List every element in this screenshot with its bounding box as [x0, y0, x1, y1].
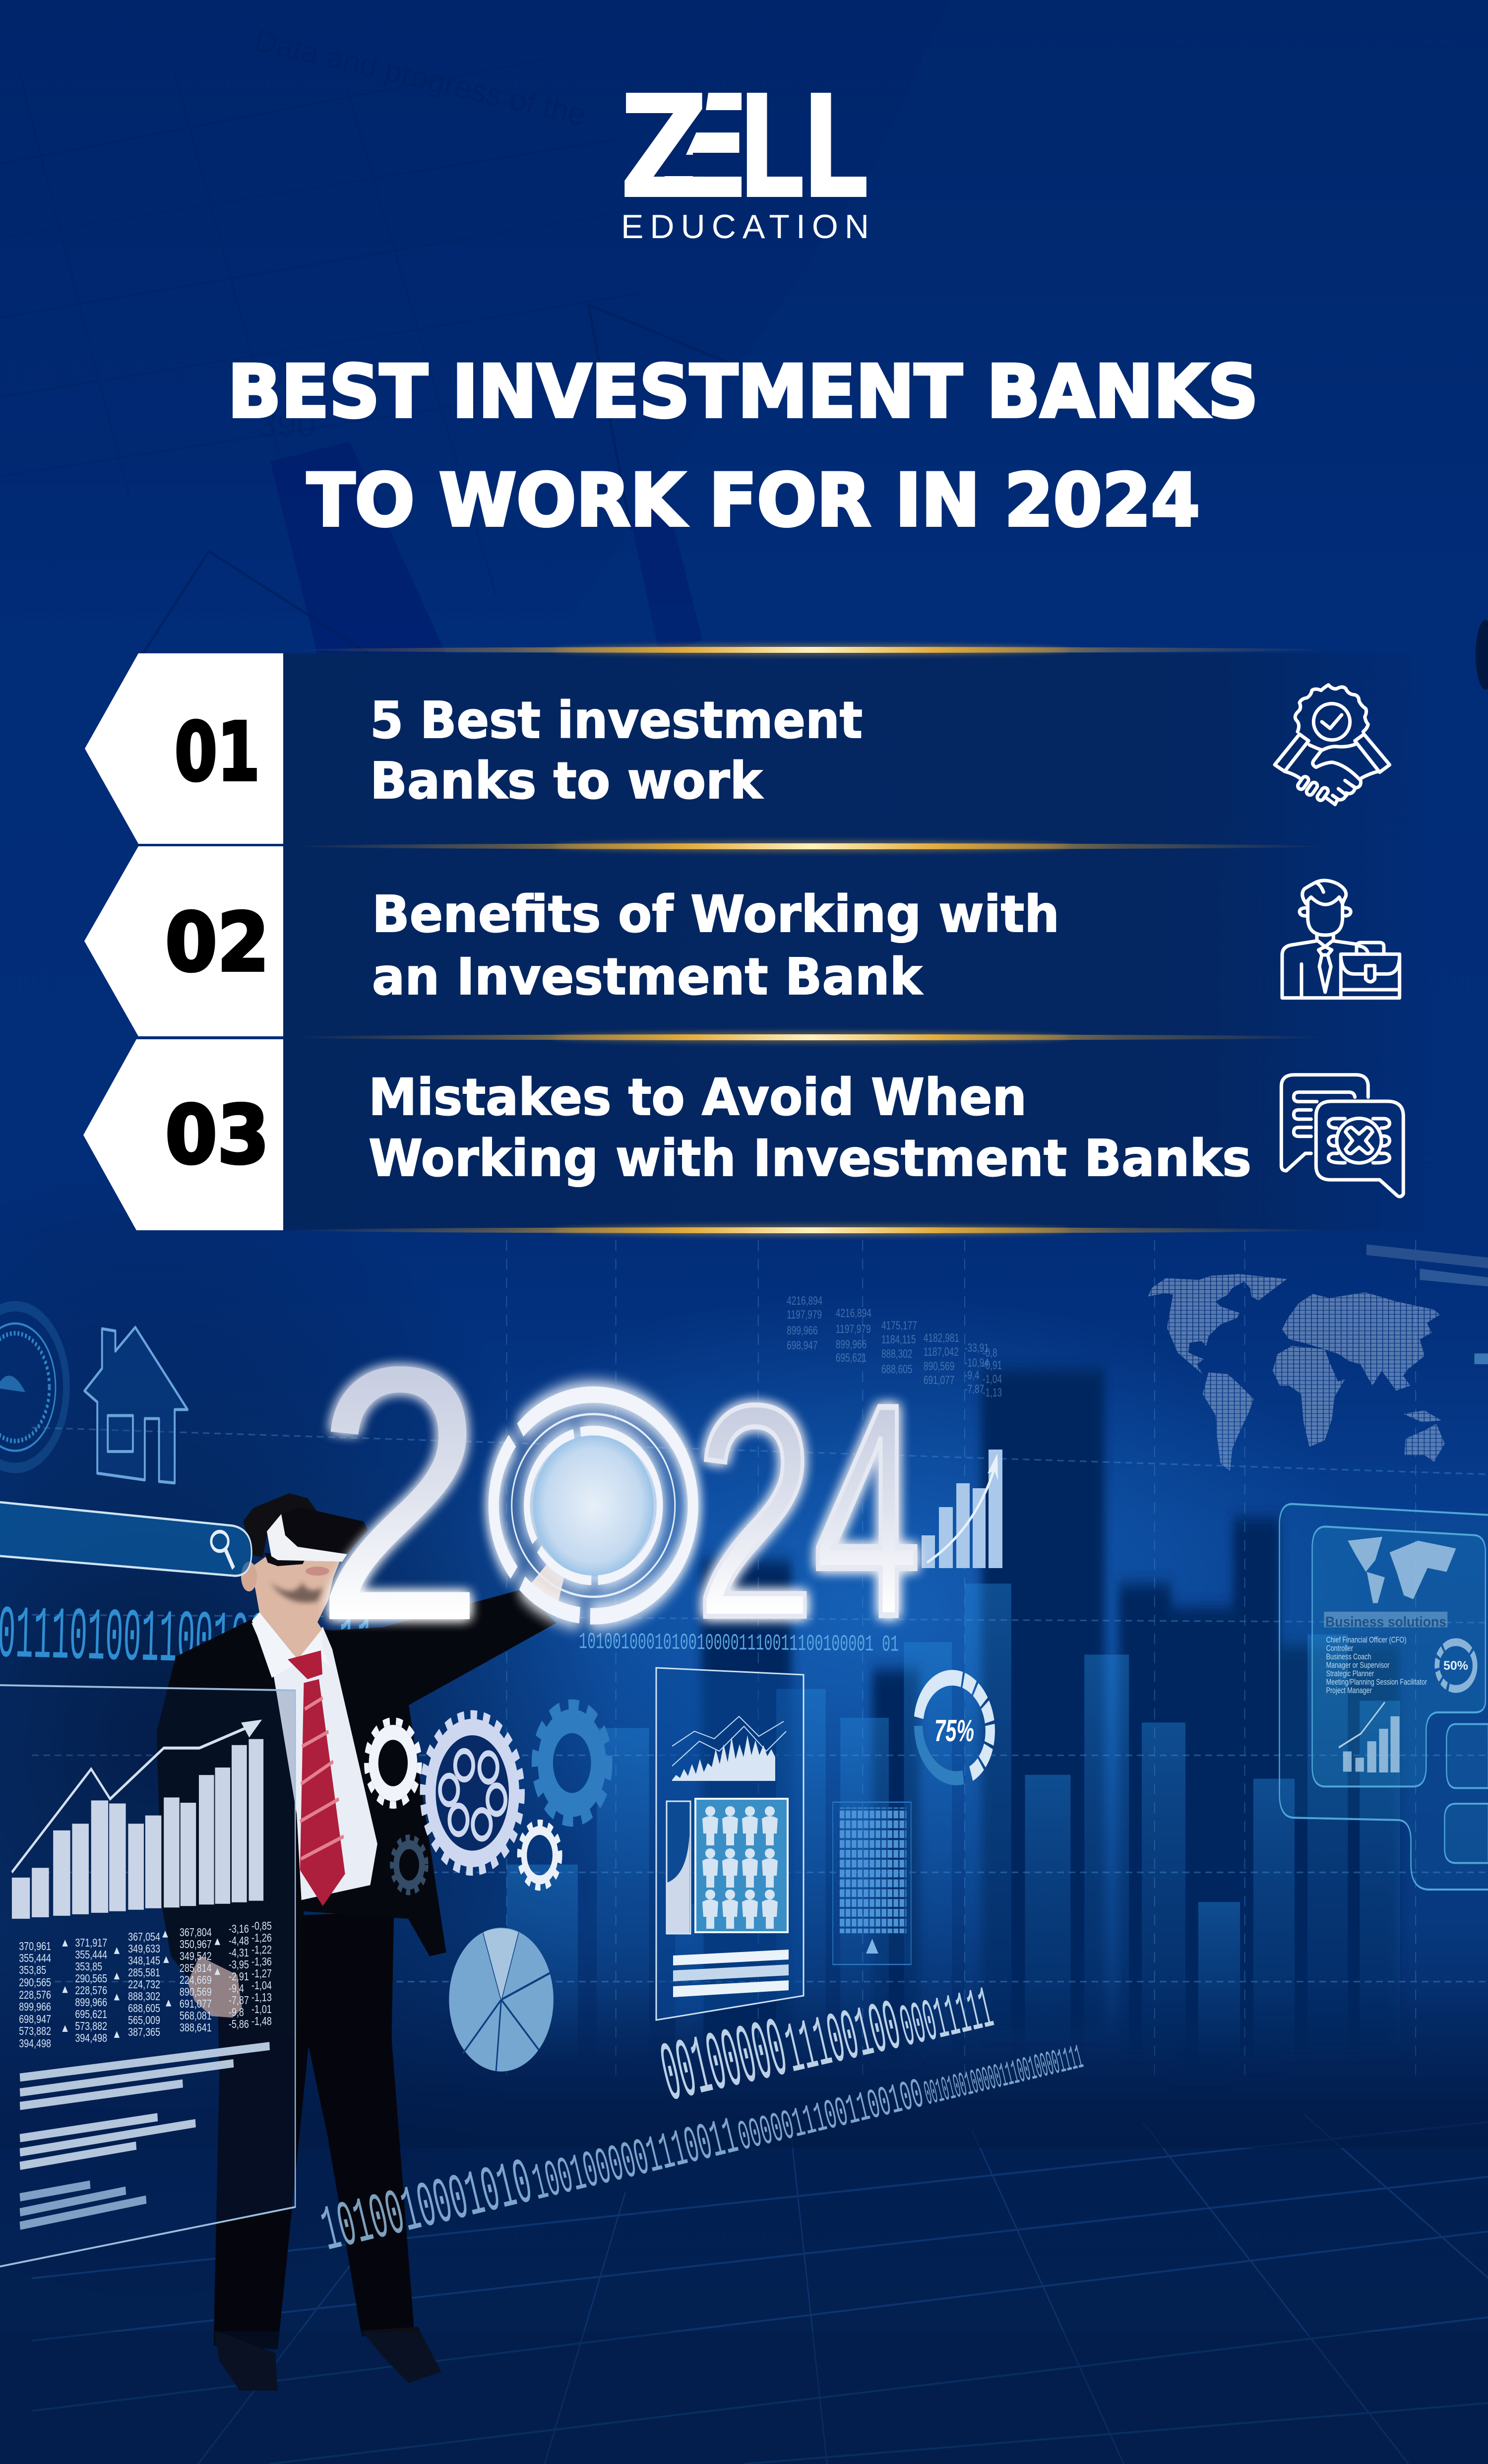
number table: -9,8 [229, 2006, 244, 2019]
text 03 [369, 1068, 1251, 1188]
binary row, lower diagonal: 1001000001110011 [527, 2108, 744, 2214]
number table: 355,444 [75, 1949, 107, 1961]
number table: 388,641 [180, 2022, 212, 2034]
number table: -1,22 [251, 1944, 272, 1957]
number tab 02 [84, 846, 283, 1036]
number table: -9,4 [229, 1982, 244, 1995]
house icon [84, 1327, 187, 1483]
small rising bar chart [922, 1450, 1002, 1568]
row 02 [84, 846, 1400, 1036]
number table: 691,077 [180, 1998, 212, 2011]
photo backdrop: skyline, translucent bars and data overlays: 001010010000011100100001111 [921, 2039, 1087, 2115]
UI panel text: Meeting/Planning Session Facilitator [1326, 1677, 1427, 1687]
large gear [423, 1715, 522, 1871]
binary row, middle diagonal [653, 1977, 999, 2125]
gold divider lines [293, 644, 1330, 1236]
number table: -5,86 [229, 2018, 249, 2031]
text 01 [370, 691, 863, 811]
number tab 03 [83, 1039, 283, 1230]
bar chart with arrow [12, 1719, 263, 1919]
number table: 573,882 [19, 2025, 51, 2038]
logo [624, 93, 867, 238]
faint numbers: 695,621 [836, 1351, 867, 1365]
blurred document behind the title: 390 [258, 405, 316, 444]
table triangles [62, 1931, 220, 2038]
number table: 695,621 [75, 2008, 107, 2021]
logo word ZELL [624, 93, 867, 197]
binary row, lower diagonal [315, 2039, 1087, 2269]
faint numbers: 1197,979 [836, 1323, 871, 1336]
number table: 568,081 [180, 2010, 212, 2022]
neck and face [241, 1555, 342, 1659]
number table: -1,48 [251, 2015, 272, 2028]
number table: -1,27 [251, 1967, 272, 1980]
number table: 285,814 [180, 1962, 212, 1975]
number table: -1,36 [251, 1956, 272, 1968]
digits [314, 1291, 921, 1696]
faint numbers: 899,966 [787, 1324, 818, 1337]
number table: -3,95 [229, 1959, 249, 1971]
logo word ZELL: L [737, 65, 806, 231]
blurred document behind the title [0, 0, 949, 655]
faint numbers: -33,91 [965, 1341, 989, 1355]
faint numbers: -9,4 [965, 1369, 980, 1382]
right UI panel [1279, 1504, 1488, 1890]
panel frame [0, 1685, 295, 2267]
number 02: 02 [165, 896, 269, 990]
faint numbers: 888,302 [881, 1347, 912, 1361]
ring target [494, 1394, 693, 1616]
number table: 353,85 [19, 1964, 46, 1977]
faint numbers: -0,8 [983, 1346, 997, 1360]
number table: 367,054 [128, 1931, 160, 1944]
UI panel text: Project Manager [1326, 1686, 1372, 1696]
skyline silhouettes [701, 1369, 1399, 2075]
title: BEST INVESTMENT BANKS [228, 350, 1258, 434]
shirt collar [252, 1612, 331, 1678]
faint numbers: -1,04 [983, 1373, 1002, 1386]
number table: -1,26 [251, 1932, 272, 1945]
left data panel [0, 1685, 295, 2267]
faint numbers: 899,966 [836, 1338, 867, 1351]
number table: 394,498 [75, 2032, 107, 2045]
number table: 899,966 [19, 2001, 51, 2014]
number table: 394,498 [19, 2037, 51, 2050]
number table: 224,732 [128, 1978, 160, 1991]
faint numbers: 890,569 [924, 1360, 954, 1373]
faint numbers: -0,91 [983, 1359, 1002, 1372]
text 02: an Investment Bank [372, 948, 923, 1007]
UI panel text: Controller [1326, 1643, 1353, 1653]
number table: -1,01 [251, 2003, 272, 2016]
dot matrix panel [833, 1802, 911, 1964]
number table: 228,576 [75, 1984, 107, 1997]
number table: 290,565 [19, 1976, 51, 1989]
number table: 890,569 [180, 1986, 212, 1999]
number table: -0,85 [251, 1920, 272, 1933]
small white gear [519, 1823, 560, 1888]
gear group [367, 1705, 609, 1892]
UI panel text: Business Coach [1326, 1652, 1371, 1662]
UI panel text: 50% [1443, 1659, 1468, 1673]
list panel [83, 644, 1439, 1236]
tall translucent bars [506, 1583, 1400, 2072]
stripes [673, 1950, 789, 1997]
number table: 228,576 [19, 1989, 51, 2002]
icon: businessman with briefcase [1282, 881, 1400, 998]
text 02: Benefits of Working with [372, 885, 1059, 944]
number table: 573,882 [75, 2020, 107, 2033]
number table: 367,804 [180, 1926, 212, 1939]
number table: 290,565 [75, 1972, 107, 1985]
logo word ZELL: L [801, 65, 869, 231]
number table: 224,669 [180, 1974, 212, 1987]
binary row, lower diagonal: 1010010001010 [315, 2148, 539, 2269]
dark band behind the list rows [283, 653, 1439, 1230]
line and waveform chart [672, 1716, 786, 1781]
UI panel text: Chief Financial Officer (CFO) [1326, 1635, 1406, 1645]
digits: 2 [694, 1342, 816, 1680]
number table: -2,91 [229, 1970, 249, 1983]
digits: 2 [314, 1291, 485, 1696]
compass icon [0, 1306, 66, 1468]
number table: 899,966 [75, 1996, 107, 2009]
number table: 370,961 [19, 1940, 51, 1953]
number table: 350,967 [180, 1938, 212, 1951]
faint numbers: 691,077 [924, 1374, 954, 1387]
UI panel text: Manager or Supervisor [1326, 1660, 1389, 1670]
text 02 [372, 885, 1059, 1007]
UI mini map and chart [1324, 1537, 1475, 1772]
logo word ZELL: Z [619, 64, 709, 231]
faint numbers: -1,13 [983, 1386, 1002, 1399]
dark gear [392, 1838, 426, 1892]
faint numbers: 4182,981 [924, 1331, 959, 1345]
number table: 355,444 [19, 1952, 51, 1965]
tie [288, 1650, 345, 1906]
dashed data grid [32, 1240, 1488, 2083]
suit and shoes [157, 1537, 572, 2391]
binary row, middle diagonal: 11100100 [779, 1987, 908, 2093]
number table: -1,13 [251, 1991, 272, 2004]
number table: 888,302 [128, 1990, 160, 2003]
icon: award handshake [1275, 685, 1390, 805]
world map [1148, 1274, 1445, 1471]
number table: -4,48 [229, 1935, 249, 1948]
number 03: 03 [165, 1089, 269, 1182]
hair [243, 1493, 318, 1558]
binary row, centre: 10100100010100100001110011100100001 01 [579, 1629, 899, 1658]
photo backdrop: skyline, translucent bars and data overlays: 011101001100100000 11 [0, 1594, 375, 1689]
binary row, middle diagonal: 00100000 [653, 2004, 796, 2125]
faint numbers: 4175,177 [881, 1319, 917, 1332]
UI panel text [1325, 1614, 1468, 1696]
faint numbers [787, 1294, 1002, 1399]
blurred document behind the title: Data and progress of the [251, 23, 589, 132]
floor grid [32, 2114, 1488, 2464]
faint numbers: 698,947 [787, 1339, 818, 1352]
corner bars near the map [1366, 1244, 1488, 1364]
number table: -4,31 [229, 1947, 249, 1959]
75% ring [914, 1668, 995, 1787]
UI panel text: Strategic Planner [1326, 1669, 1374, 1679]
text 01: 5 Best investment [370, 691, 863, 750]
faint numbers: -7,87 [965, 1383, 984, 1396]
number table: 387,365 [128, 2026, 160, 2039]
number table [19, 1920, 272, 2050]
number tab 01 [85, 653, 283, 844]
row 01 [85, 653, 1390, 844]
number table: 371,917 [75, 1937, 107, 1950]
faint numbers: 1187,042 [924, 1345, 959, 1359]
hand on the data panel [187, 1956, 242, 2018]
number table: 349,633 [128, 1943, 160, 1956]
logo word EDUCATION: EDUCATION [621, 208, 869, 246]
row 03 [83, 1039, 1403, 1230]
text 03: Working with Investment Banks [369, 1129, 1251, 1188]
photo backdrop: skyline, translucent bars and data overlays: 00011111 [895, 1977, 999, 2063]
title [228, 350, 1258, 543]
number 01: 01 [175, 706, 260, 799]
blue gear [535, 1705, 609, 1822]
number table: -7,87 [229, 1994, 249, 2007]
number table: 285,581 [128, 1966, 160, 1979]
VR headset [264, 1507, 368, 1566]
number table: 353,85 [75, 1960, 102, 1973]
number table: 348,145 [128, 1955, 160, 1967]
logo word ZELL: E [650, 64, 755, 231]
businessman with VR headset [157, 1493, 572, 2391]
number table: 349,542 [180, 1950, 212, 1963]
text 01: Banks to work [370, 752, 763, 811]
faint numbers: -10,94 [965, 1356, 989, 1370]
text-line bars [20, 2046, 270, 2226]
left white gear [367, 1721, 420, 1805]
number table: 565,009 [128, 2014, 160, 2027]
binary row, lower diagonal: 00000111001100100 [734, 2071, 928, 2162]
75% ring: 75% [934, 1714, 974, 1748]
faint numbers: 4216,894 [836, 1307, 871, 1320]
faint numbers: 688,605 [881, 1363, 912, 1376]
number table: -3,16 [229, 1923, 249, 1936]
digits: 4 [813, 1341, 921, 1680]
photo backdrop: skyline, translucent bars and data overlays [0, 1240, 1488, 2464]
large 2024 with ring [314, 1291, 921, 1696]
text 03: Mistakes to Avoid When [369, 1068, 1027, 1127]
faint numbers: 4216,894 [787, 1294, 823, 1308]
number table: 698,947 [19, 2013, 51, 2026]
pie chart [449, 1928, 554, 2072]
title: TO WORK FOR IN 2024 [307, 458, 1200, 543]
UI panel text: Business solutions [1325, 1614, 1446, 1630]
central data panel [656, 1668, 804, 2020]
icon: chat bubbles with cross [1281, 1075, 1403, 1197]
small side panel [667, 1801, 690, 1934]
number table: 688,605 [128, 2002, 160, 2015]
faint numbers: 1197,979 [787, 1308, 822, 1322]
people box [695, 1799, 788, 1932]
faint numbers: 1184,115 [881, 1333, 916, 1346]
number table: -1,04 [251, 1979, 272, 1992]
search bar [0, 1502, 251, 1576]
